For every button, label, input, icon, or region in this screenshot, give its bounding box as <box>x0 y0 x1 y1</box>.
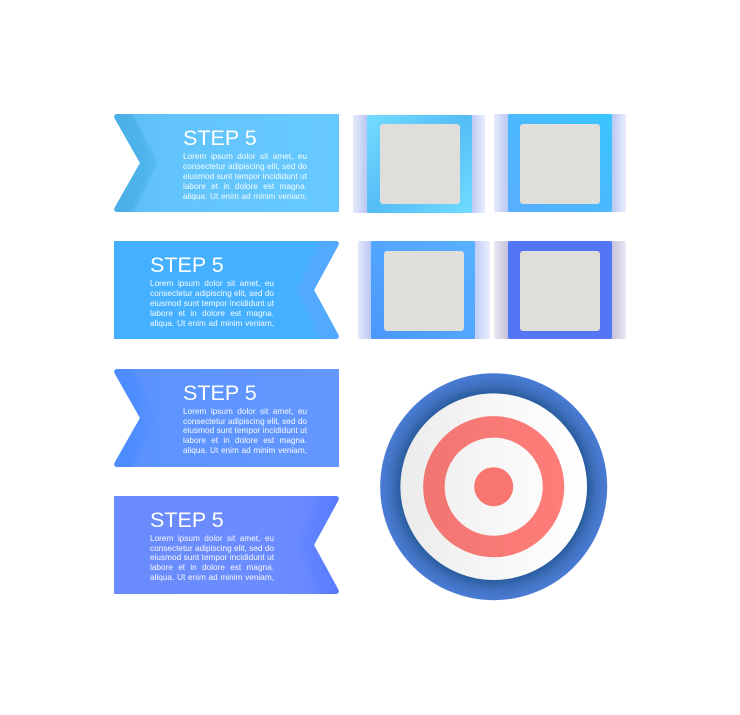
text block: consectetur adipiscing elit, sed do <box>150 544 274 553</box>
text block: Lorem ipsum dolor sit amet, eu <box>183 152 307 161</box>
text block: aliqua. Ut enim ad minim veniam, <box>150 573 274 582</box>
text block: eiusmod sunt tempor incididunt ut <box>150 553 274 562</box>
image tile: row 1 left <box>353 115 485 213</box>
text block: Lorem ipsum dolor sit amet, eu <box>150 279 274 288</box>
image tile: row 1 right <box>494 114 626 212</box>
red ring <box>434 427 554 546</box>
panel: ribbon step 1 <box>114 114 339 212</box>
heading: step 5: STEP 5 <box>150 253 224 277</box>
target icon <box>380 373 608 600</box>
text block <box>183 152 307 201</box>
heading: step 5: STEP 5 <box>183 380 257 404</box>
bullseye <box>474 467 513 506</box>
outer blue ring <box>380 373 607 600</box>
text block: eiusmod sunt tempor incididunt ut <box>183 172 307 181</box>
text block: labore et in dolore est magna. <box>183 436 307 445</box>
panel: ribbon step 2 <box>114 241 339 339</box>
text block: consectetur adipiscing elit, sed do <box>150 289 274 298</box>
text block <box>150 534 274 582</box>
text block: aliqua. Ut enim ad minim veniam, <box>150 319 274 328</box>
text block: Lorem ipsum dolor sit amet, eu <box>150 534 274 543</box>
text block <box>150 279 274 328</box>
image tile: row 2 left <box>358 241 490 339</box>
text block: eiusmod sunt tempor incididunt ut <box>183 426 307 435</box>
text block: consectetur adipiscing elit, sed do <box>183 417 307 426</box>
text block: consectetur adipiscing elit, sed do <box>183 162 307 171</box>
text block: aliqua. Ut enim ad minim veniam, <box>183 192 307 201</box>
text block: Lorem ipsum dolor sit amet, eu <box>183 407 307 416</box>
panel: ribbon step 4 <box>114 496 339 594</box>
white face <box>400 393 587 580</box>
text block: aliqua. Ut enim ad minim veniam, <box>183 446 307 455</box>
heading: step 5: STEP 5 <box>183 126 257 150</box>
heading: step 5: STEP 5 <box>150 508 224 532</box>
text block <box>183 407 307 455</box>
panel: ribbon step 3 <box>114 369 339 467</box>
text block: eiusmod sunt tempor incididunt ut <box>150 299 274 308</box>
image tile: row 2 right <box>494 241 626 339</box>
text block: labore et in dolore est magna. <box>150 563 274 572</box>
text block: labore et in dolore est magna. <box>150 309 274 318</box>
text block: labore et in dolore est magna. <box>183 182 307 191</box>
